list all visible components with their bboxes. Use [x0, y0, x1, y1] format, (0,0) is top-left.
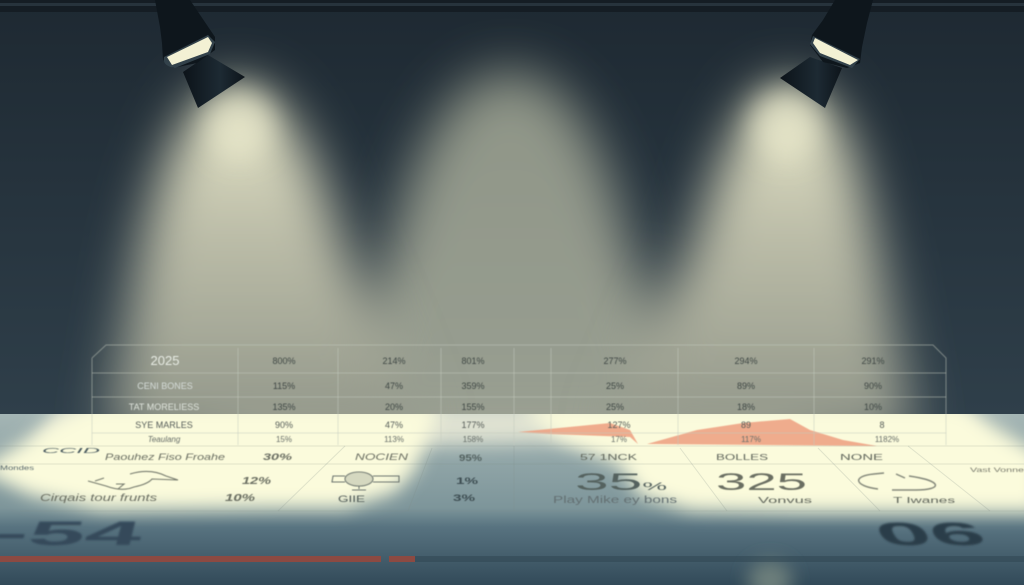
- lamp lens rim: [810, 36, 860, 68]
- printed floor content: right: [553, 453, 1024, 506]
- label: upper-left floor mark: CCID: [42, 448, 100, 455]
- ceiling rail: [0, 0, 1024, 12]
- row: 4: 158%: [463, 435, 483, 444]
- row: 4: 113%: [384, 435, 404, 444]
- label: BOLLES: BOLLES: [716, 453, 768, 462]
- row: 3: 127%: [607, 420, 631, 430]
- row: 4: 17%: [611, 435, 627, 444]
- row: header: 2025: [151, 353, 179, 368]
- label: GIIE: GIIE: [338, 494, 365, 504]
- row: 1: [137, 381, 882, 391]
- row: 3: 8: [879, 420, 885, 430]
- label: far-left floor note: Mondes: [0, 466, 34, 472]
- label: Vonvus: Vonvus: [758, 496, 812, 505]
- bar track: [415, 556, 1024, 562]
- row: 1: CENI BONES: [137, 381, 193, 391]
- lamp cone: [780, 57, 842, 108]
- floor light pools: [0, 405, 1024, 585]
- floor grid lines: [0, 446, 1024, 511]
- lamp lens: [167, 37, 212, 65]
- beam: middle: [350, 72, 670, 440]
- row: 3: 90%: [275, 420, 293, 430]
- row: 2: TAT MORELIESS: [129, 402, 199, 412]
- wide wall glow: [187, 260, 838, 414]
- lamp lens rim: [164, 35, 215, 68]
- row: 4: Teaulang: [148, 435, 181, 444]
- label: Cirqais tour frunts: Cirqais tour frunts: [40, 493, 157, 504]
- row: 2: 155%: [461, 402, 485, 412]
- progress bar: [0, 556, 1024, 562]
- row: header: 801%: [461, 356, 485, 366]
- row: 4: [148, 435, 899, 444]
- data table: [92, 345, 946, 445]
- row: header: 294%: [734, 356, 758, 366]
- row: header: 800%: [272, 356, 296, 366]
- row: header: 214%: [382, 356, 406, 366]
- bar: short red segment: [389, 556, 415, 562]
- icon: circular arrows: [88, 471, 178, 489]
- light beams on wall: [78, 40, 942, 414]
- label: floor heading: Paouhez Fiso Froahe: [105, 452, 225, 462]
- table grid: [92, 345, 946, 445]
- printed floor content: left: [0, 448, 482, 504]
- light pool: left: [0, 405, 440, 510]
- value: 3%: 3%: [453, 493, 475, 503]
- floor light band: [30, 405, 985, 450]
- beam: left: [105, 85, 425, 440]
- row: 3: SYE MARLES: [135, 420, 193, 430]
- beam: right: [610, 85, 915, 440]
- value: 325: 325: [716, 469, 807, 496]
- beam hot spot: left: [206, 91, 274, 159]
- row: 1: 90%: [864, 381, 882, 391]
- value: 35%: 35 %: [575, 469, 668, 496]
- row: 2: 10%: [864, 402, 882, 412]
- row: 1: 25%: [606, 381, 624, 391]
- label: Play Mike: Play Mike ey bons: [553, 495, 677, 506]
- value: 12%: 12%: [242, 476, 271, 487]
- row: 4: 117%: [741, 435, 761, 444]
- row: 3: 89: [741, 420, 751, 430]
- orange area chart: [518, 419, 877, 446]
- row: 1: 47%: [385, 381, 403, 391]
- light pool: right: [520, 405, 1024, 512]
- row: 2: 135%: [272, 402, 296, 412]
- area: right hump: [647, 419, 877, 446]
- row: header: 291%: [861, 356, 885, 366]
- spotlight: right: [780, 0, 873, 108]
- area: left wedge: [518, 423, 638, 444]
- lamp lens: [813, 38, 858, 65]
- value: 30%: 30%: [263, 452, 292, 462]
- row: 3: 47%: [385, 420, 403, 430]
- row: 4: 15%: [276, 435, 292, 444]
- row: 3: [135, 420, 885, 430]
- row: 4: 1182%: [875, 435, 899, 444]
- row: 2: 18%: [737, 402, 755, 412]
- bar: long red segment: [0, 556, 381, 562]
- row: header: [151, 353, 885, 368]
- icon: globe on stand: [332, 472, 399, 490]
- beam hot spot: right: [751, 91, 819, 159]
- label: NONE: NONE: [840, 453, 883, 462]
- lamp cone: [183, 55, 245, 108]
- row: header: 277%: [603, 356, 627, 366]
- row: 1: 89%: [737, 381, 755, 391]
- floor centre glow: [748, 560, 792, 585]
- label: T Iwanes: T Iwanes: [893, 496, 955, 505]
- label: far-right floor note: Vast Vonne: [970, 468, 1024, 474]
- row: 2: 25%: [606, 402, 624, 412]
- icon: gauge ring: [859, 473, 935, 490]
- row: 2: 20%: [385, 402, 403, 412]
- value: 10%: 10%: [225, 493, 255, 504]
- floor: [0, 414, 1024, 585]
- large numeral: 06: 06: [867, 516, 993, 552]
- value: 95%: 95%: [459, 453, 482, 463]
- value: 1%: 1%: [456, 476, 478, 486]
- spotlight: left: [155, 0, 245, 108]
- back wall: [0, 0, 1024, 414]
- row: 3: 177%: [461, 420, 485, 430]
- lamp body: [155, 0, 215, 68]
- label: 57 INCK: 57 1NCK: [580, 453, 638, 462]
- row: 2: [129, 402, 882, 412]
- label: NOCIEN: NOCIEN: [355, 452, 409, 462]
- row: 1: 359%: [461, 381, 485, 391]
- row: 1: 115%: [273, 381, 295, 391]
- lamp body: [810, 0, 873, 68]
